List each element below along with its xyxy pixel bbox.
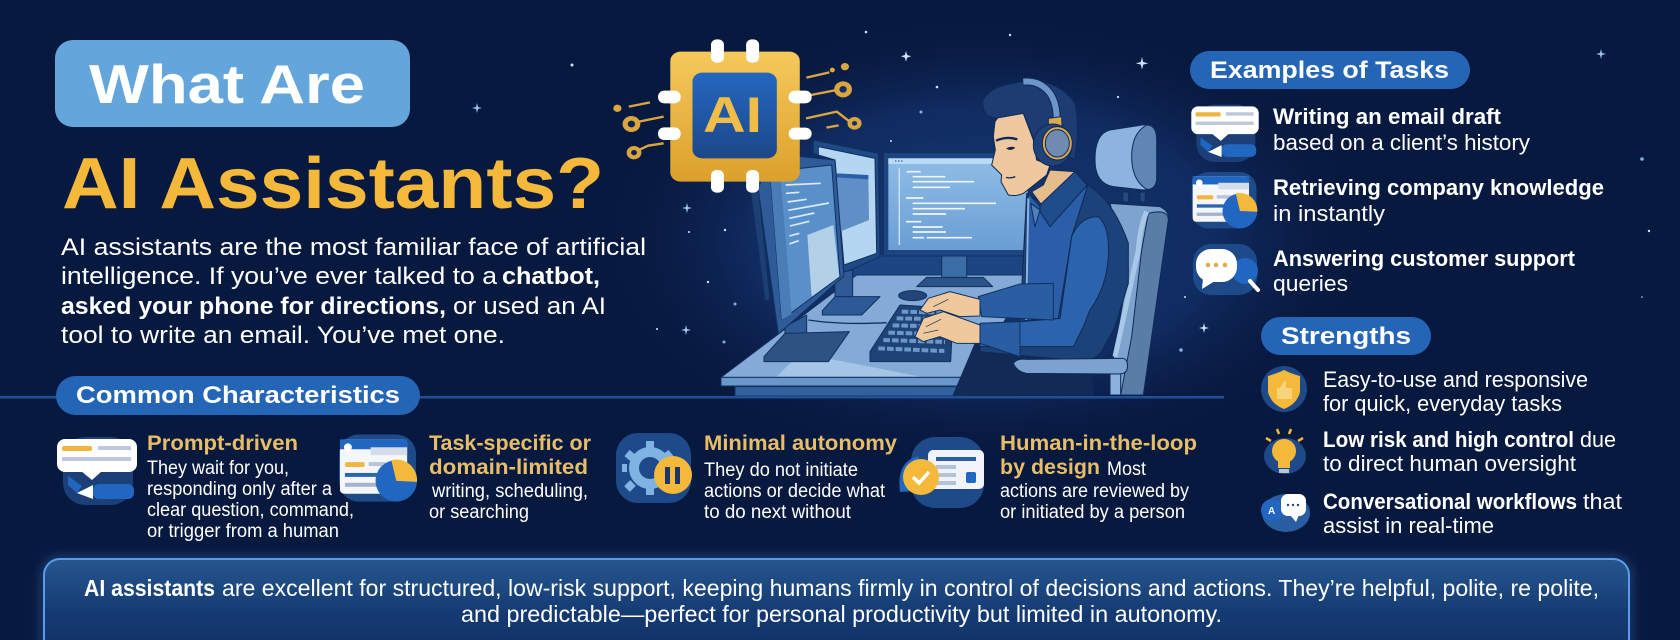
icon: speech bubble with magnifier xyxy=(1193,244,1258,295)
lower hand xyxy=(915,312,980,343)
wall band behind desk xyxy=(847,255,1033,277)
intro paragraph xyxy=(61,234,646,349)
task: answering customer support: queries xyxy=(1273,271,1348,296)
strength: easy to use: Easy-to-use and responsive xyxy=(1323,367,1588,392)
strength: conversational workflows xyxy=(1261,489,1622,538)
icon: chat with pen xyxy=(57,437,137,505)
characteristic: human-in-the-loop: Human-in-the-loop xyxy=(1000,432,1197,455)
characteristic: human-in-the-loop: by design xyxy=(1000,456,1100,479)
icon: gear with pause xyxy=(616,433,692,503)
background glow behind illustration xyxy=(595,15,1375,465)
strength: low risk and high control xyxy=(1264,427,1616,476)
circuit traces xyxy=(613,63,859,157)
heading: Strengths: Strengths xyxy=(1281,323,1411,350)
title: AI Assistants?: AI Assistants? xyxy=(62,144,604,224)
armrest xyxy=(1013,358,1127,374)
arm xyxy=(980,217,1109,347)
strength: conversational workflows: that xyxy=(1583,489,1622,514)
characteristic: prompt-driven xyxy=(57,432,354,542)
strength: easy to use xyxy=(1261,366,1588,416)
divider line xyxy=(0,396,1224,398)
icon: window with pie chart xyxy=(1192,172,1257,228)
characteristic: prompt-driven: They wait for you, xyxy=(147,458,289,479)
intro paragraph: tool to write an email. You’ve met one. xyxy=(61,322,505,349)
panel: summary callout: are excellent for structured, low-risk support, keeping humans firmly in control of decisions and actions. They’re helpful, polite, re polite, xyxy=(222,575,1599,601)
title pill: What Are: What Are xyxy=(89,53,365,115)
desk and monitors xyxy=(721,140,1033,396)
chair headrest xyxy=(1095,124,1157,202)
intro paragraph: chatbot, xyxy=(502,263,600,290)
intro paragraph: or used an AI xyxy=(453,293,606,320)
characteristic: task-specific xyxy=(339,432,591,523)
starfield xyxy=(472,31,1650,352)
back monitor stand xyxy=(822,270,880,315)
characteristic: prompt-driven: Prompt-driven xyxy=(147,432,298,455)
characteristic: task-specific: domain-limited xyxy=(429,456,588,479)
illustration: programmer at desk with monitors xyxy=(721,80,1169,396)
icon: card with check badge xyxy=(899,437,984,508)
characteristic: minimal autonomy: actions or decide what xyxy=(704,481,886,502)
characteristic: minimal autonomy: to do next without xyxy=(704,502,852,523)
trousers xyxy=(953,337,1093,395)
intro paragraph: AI assistants are the most familiar face of artificial xyxy=(61,234,646,261)
torso xyxy=(980,170,1128,361)
upper hand xyxy=(920,292,980,317)
title pill: What Are xyxy=(55,40,410,127)
heading: Common Characteristics: Common Characteristics xyxy=(76,382,400,409)
icon: light bulb xyxy=(1264,429,1306,474)
task: writing an email draft: based on a client’s history xyxy=(1273,130,1530,155)
hands and sleeves xyxy=(915,283,1053,357)
characteristic: minimal autonomy: They do not initiate xyxy=(704,460,858,481)
characteristic: prompt-driven: responding only after a xyxy=(147,479,332,500)
characteristic: human-in-the-loop: Most xyxy=(1107,459,1147,480)
icon: chat bubbles xyxy=(1261,494,1310,532)
characteristic: minimal autonomy xyxy=(616,432,897,523)
mouse xyxy=(899,291,927,301)
panel: summary callout: AI assistants xyxy=(84,575,215,601)
intro paragraph: asked your phone for directions, xyxy=(61,293,446,320)
characteristic: task-specific: or searching xyxy=(429,502,529,523)
intro paragraph: intelligence. If you’ve ever talked to a xyxy=(61,263,498,290)
task: retrieving company knowledge: Retrieving company knowledge xyxy=(1273,175,1604,200)
strength: easy to use: for quick, everyday tasks xyxy=(1323,391,1562,416)
heading: Examples of Tasks: Examples of Tasks xyxy=(1210,57,1449,84)
icon: chat with pen xyxy=(1191,105,1259,162)
strength: conversational workflows: assist in real-time xyxy=(1323,513,1494,538)
icon: window with pie chart xyxy=(339,434,417,502)
AI chip label: AI xyxy=(703,87,762,143)
chip pins xyxy=(658,39,812,193)
characteristic: prompt-driven: clear question, command, xyxy=(147,500,354,521)
upper sleeve xyxy=(978,283,1053,320)
characteristic: human-in-the-loop: actions are reviewed by xyxy=(1000,481,1189,502)
keyboard xyxy=(870,305,953,362)
icon: shield with thumb xyxy=(1261,366,1307,412)
chair back xyxy=(1063,203,1169,395)
characteristic: human-in-the-loop xyxy=(899,432,1197,523)
characteristic: minimal autonomy: Minimal autonomy xyxy=(704,432,897,455)
strength: low risk and high control: due xyxy=(1580,427,1616,452)
task: retrieving company knowledge: in instantly xyxy=(1273,201,1385,226)
heading: Strengths xyxy=(1261,317,1431,355)
front monitor xyxy=(751,153,849,362)
strength: low risk and high control: Low risk and high control xyxy=(1323,427,1574,452)
task: answering customer support xyxy=(1193,244,1576,296)
AI chip xyxy=(613,39,859,193)
heading: Common Characteristics xyxy=(56,376,420,415)
strength: conversational workflows: Conversational workflows xyxy=(1323,489,1577,514)
panel: summary callout: and predictable—perfect for personal productivity but limited in autonomy. xyxy=(461,601,1222,627)
task: writing an email draft: Writing an email draft xyxy=(1273,104,1502,129)
right monitor xyxy=(883,153,1028,287)
chip body xyxy=(670,52,800,182)
icon: chat bubbles: A xyxy=(1268,506,1275,517)
head xyxy=(983,80,1077,196)
task: answering customer support: Answering customer support xyxy=(1273,246,1576,271)
task: writing an email draft xyxy=(1191,104,1530,162)
strength: low risk and high control: to direct human oversight xyxy=(1323,451,1576,476)
panel: summary callout xyxy=(44,559,1629,640)
chair, torso and head xyxy=(953,80,1169,395)
lower sleeve xyxy=(980,322,1020,357)
characteristic: human-in-the-loop: or initiated by a person xyxy=(1000,502,1185,523)
characteristic: prompt-driven: or trigger from a human xyxy=(147,521,339,542)
desk top xyxy=(721,275,1030,396)
characteristic: task-specific: writing, scheduling, xyxy=(431,481,588,502)
heading: Examples of Tasks xyxy=(1190,51,1470,89)
task: retrieving company knowledge xyxy=(1192,172,1604,228)
back monitor xyxy=(813,140,880,273)
characteristic: task-specific: Task-specific or xyxy=(429,432,591,455)
